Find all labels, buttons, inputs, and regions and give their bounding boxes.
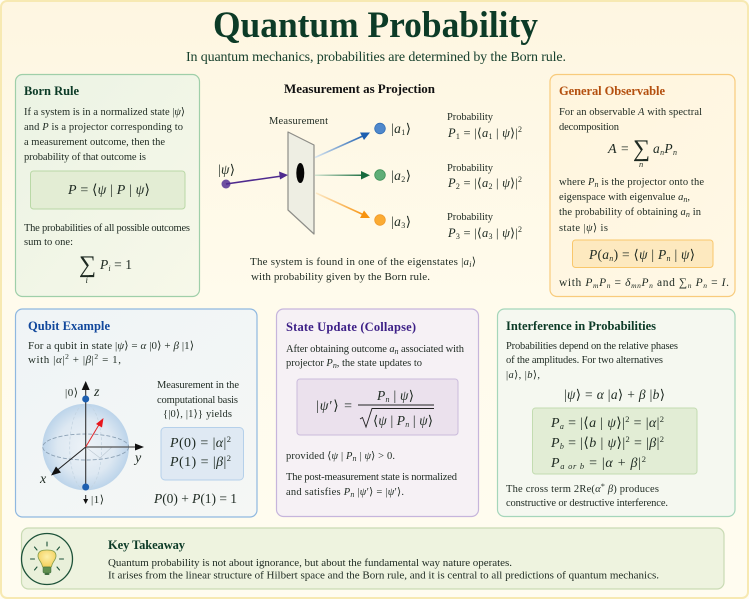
formula box: interference probabilities: b | ψ⟩| bbox=[589, 436, 625, 451]
text: interference intro bbox=[506, 341, 678, 381]
formula: normalisation: P(0) + P(1) = 1 bbox=[153, 491, 237, 506]
outcome a3: 3 bbox=[401, 221, 405, 230]
text: projector relations: with P bbox=[559, 277, 592, 289]
heading: Interference in Probabilities: Interference in Probabilities bbox=[506, 319, 656, 333]
Bloch sphere: y bbox=[133, 451, 142, 466]
text: interference intro: of the amplitudes. For two alternatives bbox=[506, 355, 663, 366]
outcome a3 bbox=[375, 214, 411, 230]
title: Quantum Probability bbox=[213, 5, 538, 46]
Bloch sphere: z bbox=[93, 385, 100, 400]
formula box: interference probabilities: = |⟨ bbox=[564, 436, 589, 451]
formula: spectral decomposition: a bbox=[653, 141, 660, 156]
formula box: qubit probabilities: P(1) = |β| bbox=[170, 455, 226, 470]
text: collapse conditions: The post-measurement state is normalized bbox=[286, 472, 458, 483]
formula box: collapse: n bbox=[386, 395, 390, 404]
formula box: qubit probabilities: 2 bbox=[227, 453, 231, 463]
probability P3: 3 bbox=[488, 232, 492, 241]
probability P2: ψ⟩| bbox=[502, 176, 518, 190]
formula: spectral decomposition: n bbox=[673, 148, 677, 157]
probability P3: 2 bbox=[518, 225, 522, 234]
text: qubit state: 2 bbox=[65, 352, 69, 361]
probability P3 bbox=[447, 212, 522, 241]
formula: sum of probabilities: = 1 bbox=[111, 257, 132, 272]
text: measurement caption: with probability given by the Born rule. bbox=[251, 271, 430, 283]
panel: State Update bbox=[276, 309, 478, 516]
text: probabilities sum bbox=[24, 223, 190, 248]
panel: Key Takeaway bbox=[22, 528, 724, 589]
probability P3: ψ⟩| bbox=[502, 226, 518, 240]
text: computational basis measurement: {|0⟩, |1⟩} yields bbox=[163, 409, 232, 420]
formula box: collapse: ψ⟩ bbox=[419, 413, 433, 428]
formula: sum of probabilities: P bbox=[99, 257, 108, 272]
heading: Measurement as Projection: Measurement as Projection bbox=[284, 81, 436, 96]
text: qubit state: For a qubit in state |ψ⟩ = α |0⟩ + β |1⟩ bbox=[28, 340, 194, 352]
text: qubit state: β| bbox=[86, 354, 94, 366]
text: projector relations: = bbox=[708, 277, 721, 289]
text: observable explanation: is the projector onto the bbox=[599, 177, 704, 188]
formula box: collapse bbox=[297, 379, 458, 435]
formula: spectral decomposition: ∑ bbox=[633, 136, 650, 162]
arrow: orange outcome bbox=[316, 193, 370, 218]
text: observable explanation: n bbox=[595, 180, 599, 189]
formula box: interference probabilities: P bbox=[550, 456, 560, 471]
text: probabilities sum: The probabilities of all possible outcomes bbox=[24, 223, 190, 234]
text: observable explanation: n bbox=[686, 210, 690, 219]
outcome a1: ⟩ bbox=[406, 121, 411, 136]
text: collapse intro: After obtaining outcome a bbox=[286, 344, 395, 355]
text: computational basis measurement: computational basis bbox=[157, 395, 238, 406]
formula: sum of probabilities bbox=[79, 252, 132, 285]
text: observable explanation: where P bbox=[559, 177, 594, 188]
probability P1: P bbox=[447, 126, 456, 140]
text: projector relations: P bbox=[598, 277, 606, 289]
text: qubit state: 2 bbox=[94, 352, 98, 361]
formula box: qubit probabilities bbox=[161, 428, 244, 480]
outcome a1 bbox=[375, 121, 411, 137]
text: collapse conditions: n bbox=[350, 490, 354, 499]
outcome a2: ⟩ bbox=[406, 168, 411, 183]
probability P2: Probability bbox=[447, 163, 494, 174]
probability P1: Probability bbox=[447, 112, 494, 123]
text: measurement caption bbox=[250, 256, 476, 283]
text: observable explanation bbox=[559, 177, 704, 234]
text: projector relations: n bbox=[703, 281, 707, 290]
formula box: interference probabilities: = | bbox=[630, 436, 649, 451]
formula: spectral decomposition: n bbox=[660, 148, 664, 157]
formula box: collapse: |ψ′⟩ = bbox=[316, 399, 352, 414]
probability P2 bbox=[447, 163, 522, 191]
outcome a2: 2 bbox=[401, 175, 405, 184]
text: projector relations: = bbox=[611, 277, 625, 289]
text: measurement caption: The system is found in one of the eigenstates |a bbox=[250, 256, 469, 268]
probability P3: = |⟨ bbox=[460, 226, 482, 240]
text: collapse intro: n bbox=[333, 361, 337, 370]
formula box: general observable: ψ⟩ bbox=[681, 247, 695, 262]
text: Born rule introduction: If a system is in a normalized state |ψ⟩ bbox=[24, 107, 185, 118]
formula box: interference probabilities: α| bbox=[649, 416, 659, 431]
formula: spectral decomposition: n bbox=[639, 159, 643, 169]
text: collapse intro: n bbox=[395, 347, 399, 356]
formula box: collapse: n bbox=[405, 420, 409, 429]
panel: Born Rule bbox=[16, 74, 200, 296]
text: qubit state: with |α| bbox=[28, 354, 65, 366]
text: Born rule introduction: probability of that outcome is bbox=[24, 152, 146, 163]
heading: State Update (Collapse): State Update (Collapse) bbox=[286, 320, 416, 334]
probability P2: 2 bbox=[488, 182, 492, 191]
probability P3: Probability bbox=[447, 212, 494, 223]
formula box: interference probabilities: = | bbox=[630, 416, 649, 431]
text: observable explanation: in bbox=[690, 207, 702, 218]
text: cross term: The cross term 2Re(α bbox=[506, 484, 601, 495]
text: measurement caption: i bbox=[469, 260, 471, 269]
subtitle: In quantum mechanics, probabilities are determined by the Born rule. bbox=[186, 50, 566, 65]
text: Born rule introduction: and P is a projector corresponding to bbox=[24, 122, 183, 133]
text: probabilities sum: sum to one: bbox=[24, 237, 73, 248]
probability P1: = |⟨ bbox=[460, 126, 482, 140]
formula box: collapse: | bbox=[390, 388, 400, 403]
probability P2: | bbox=[493, 176, 502, 190]
formula box: interference probabilities: 2 bbox=[625, 414, 630, 424]
formula box: interference probabilities: a bbox=[560, 422, 564, 431]
outcome a3: |a bbox=[391, 214, 401, 229]
formula box: interference probabilities: α + β| bbox=[605, 456, 641, 471]
formula: superposition: |ψ⟩ = α |a⟩ + β |b⟩ bbox=[564, 387, 665, 402]
formula box: interference probabilities: 2 bbox=[660, 414, 664, 424]
heading: Qubit Example: Qubit Example bbox=[28, 319, 110, 333]
arrow: green outcome bbox=[315, 171, 370, 180]
input state psi bbox=[218, 162, 288, 188]
formula box: qubit probabilities: 2 bbox=[227, 434, 231, 444]
formula box: general observable: n bbox=[667, 254, 671, 263]
formula: spectral decomposition: = bbox=[621, 141, 629, 156]
text: observable explanation: the probability of obtaining a bbox=[559, 207, 686, 218]
input state psi: |ψ⟩ bbox=[218, 162, 235, 177]
probability P3: P bbox=[447, 226, 456, 240]
formula box: collapse: ψ⟩ bbox=[400, 388, 414, 403]
Bloch sphere bbox=[39, 381, 144, 506]
formula box: collapse: ⟨ψ | P bbox=[373, 413, 405, 428]
text: observable intro bbox=[559, 107, 702, 133]
probability P2: 2 bbox=[456, 182, 460, 191]
outcome a2 bbox=[375, 168, 411, 184]
text: collapse intro bbox=[286, 344, 465, 370]
text: projector relations: n bbox=[649, 281, 653, 290]
text: key takeaway body: Quantum probability is not about ignorance, but about the fundamental way nature operates. bbox=[108, 557, 512, 569]
label: Measurement: Measurement bbox=[269, 116, 328, 127]
panel: Qubit Example bbox=[16, 309, 257, 517]
text: key takeaway body: It arises from the linear structure of Hilbert space and the Born rule, and it is central to all predictions of quantum mechanics. bbox=[108, 570, 659, 582]
text: projector relations: I. bbox=[722, 277, 729, 289]
formula: sum of probabilities: ∑ bbox=[79, 252, 96, 278]
formula: spectral decomposition: P bbox=[663, 141, 673, 156]
text: interference intro: |a⟩, |b⟩, bbox=[506, 370, 540, 381]
text: observable explanation: , bbox=[687, 192, 690, 203]
panel: Measurement as Projection bbox=[218, 81, 522, 283]
formula box: interference probabilities: β| bbox=[649, 436, 659, 451]
probability P1: ψ⟩| bbox=[502, 126, 518, 140]
panel: Interference in Probabilities bbox=[498, 309, 735, 516]
text: qubit state: + | bbox=[69, 354, 85, 366]
outcome a2: |a bbox=[391, 168, 401, 183]
outcome a1: |a bbox=[391, 121, 401, 136]
formula box: general observable: | bbox=[671, 247, 681, 262]
formula box: collapse: | bbox=[409, 413, 419, 428]
text: qubit state: = 1, bbox=[99, 354, 121, 366]
formula box: collapse: P bbox=[376, 388, 385, 403]
icon: light bulb bbox=[22, 534, 72, 584]
text: cross term: β bbox=[605, 484, 614, 495]
heading: Key Takeaway: Key Takeaway bbox=[108, 538, 186, 552]
formula box: interference probabilities: P bbox=[550, 416, 560, 431]
text: projector relations: δ bbox=[625, 277, 631, 289]
probability P2: = |⟨ bbox=[460, 176, 482, 190]
text: projector relations: and ∑ bbox=[654, 277, 687, 289]
text: cross term: * bbox=[601, 482, 605, 491]
text: observable intro: For an observable A with spectral bbox=[559, 107, 702, 118]
formula box: interference probabilities: P bbox=[550, 436, 560, 451]
text: collapse intro: , the state updates to bbox=[337, 358, 422, 369]
formula box: general observable: P(a bbox=[589, 247, 609, 262]
probability P1: 2 bbox=[518, 125, 522, 134]
formula box: general observable bbox=[572, 240, 713, 268]
panel: General Observable bbox=[550, 74, 735, 296]
text: collapse intro: projector P bbox=[286, 358, 333, 369]
text: cross term: ) produces bbox=[613, 484, 659, 495]
probability P2: P bbox=[447, 176, 456, 190]
Bloch sphere: |1⟩ bbox=[91, 494, 104, 506]
text: observable intro: decomposition bbox=[559, 122, 620, 133]
formula box: general observable: ψ | P bbox=[639, 247, 666, 262]
probability P3: | bbox=[493, 226, 502, 240]
heading: Born Rule: Born Rule bbox=[24, 84, 79, 98]
formula: sum of probabilities: i bbox=[108, 264, 111, 273]
formula box: interference probabilities: b bbox=[560, 442, 564, 451]
formula box: Born rule: P = ⟨ψ | P | ψ⟩ bbox=[67, 183, 150, 198]
text: projector relations: mn bbox=[631, 281, 641, 290]
outcome a3: ⟩ bbox=[406, 214, 411, 229]
text: collapse conditions: ψ⟩ > 0. bbox=[364, 451, 395, 462]
formula: sum of probabilities: i bbox=[86, 275, 88, 285]
probability P1: 1 bbox=[456, 132, 460, 141]
formula box: interference probabilities: a | ψ⟩| bbox=[589, 416, 625, 431]
Bloch sphere: |0⟩ bbox=[65, 387, 78, 399]
text: projector relations: n bbox=[688, 281, 692, 290]
formula box: interference probabilities: = | bbox=[585, 456, 605, 471]
probability P2: 2 bbox=[518, 175, 522, 184]
text: measurement caption: ⟩ bbox=[472, 256, 476, 268]
text: projector relations: P bbox=[641, 277, 649, 289]
formula: spectral decomposition: A bbox=[607, 142, 617, 157]
text: observable explanation: state |ψ⟩ is bbox=[559, 223, 608, 234]
text: Born rule introduction bbox=[24, 107, 185, 163]
text: collapse intro: associated with bbox=[398, 344, 465, 355]
formula box: interference probabilities: a or b bbox=[560, 461, 584, 471]
probability P1: 1 bbox=[488, 132, 492, 141]
text: Born rule introduction: a measurement outcome, then the bbox=[24, 137, 165, 148]
text: observable explanation: eigenspace with eigenvalue a bbox=[559, 192, 683, 203]
formula box: interference probabilities: 2 bbox=[660, 434, 664, 444]
formula box: interference probabilities: 2 bbox=[642, 454, 646, 464]
text: computational basis measurement bbox=[157, 380, 239, 420]
text: collapse conditions: | bbox=[357, 451, 364, 462]
text: qubit state bbox=[28, 340, 194, 366]
formula box: general observable: n bbox=[609, 254, 613, 263]
formula box: interference probabilities: 2 bbox=[626, 434, 630, 444]
text: cross term: constructive or destructive interference. bbox=[506, 498, 668, 509]
Bloch sphere: x bbox=[39, 472, 47, 487]
text: collapse conditions: and satisfies P bbox=[286, 487, 350, 498]
probability P1 bbox=[447, 112, 522, 141]
formula box: qubit probabilities: P(0) = |α| bbox=[170, 436, 226, 451]
outcome a1: 1 bbox=[401, 128, 405, 137]
arrow: blue outcome bbox=[315, 132, 370, 158]
probability P2: a bbox=[482, 176, 488, 190]
formula box: interference probabilities bbox=[532, 408, 697, 474]
probability P1: a bbox=[482, 126, 488, 140]
formula: spectral decomposition bbox=[607, 136, 677, 169]
text: computational basis measurement: Measurement in the bbox=[157, 380, 239, 391]
text: projector relations: m bbox=[593, 281, 599, 290]
probability P3: a bbox=[482, 226, 488, 240]
text: projector relations: P bbox=[692, 277, 703, 289]
text: collapse conditions: provided ⟨ψ | P bbox=[286, 451, 352, 462]
formula box: interference probabilities: = |⟨ bbox=[564, 416, 589, 431]
text: cross term bbox=[506, 482, 668, 509]
text: interference intro: Probabilities depend on the relative phases bbox=[506, 341, 678, 352]
measurement plate bbox=[288, 132, 314, 234]
formula box: Born rule bbox=[30, 171, 185, 209]
formula box: general observable: ) = ⟨ bbox=[614, 247, 639, 262]
heading: General Observable: General Observable bbox=[559, 84, 665, 98]
probability P3: 3 bbox=[456, 232, 460, 241]
text: collapse conditions: n bbox=[353, 454, 357, 463]
text: collapse conditions: | bbox=[355, 487, 360, 498]
text: observable explanation: n bbox=[683, 195, 687, 204]
text: collapse conditions bbox=[286, 451, 458, 499]
probability P1: | bbox=[493, 126, 502, 140]
text: collapse conditions: ψ′⟩ = |ψ′⟩. bbox=[360, 487, 404, 498]
text: projector relations: n bbox=[607, 281, 611, 290]
text: key takeaway body bbox=[108, 557, 659, 582]
